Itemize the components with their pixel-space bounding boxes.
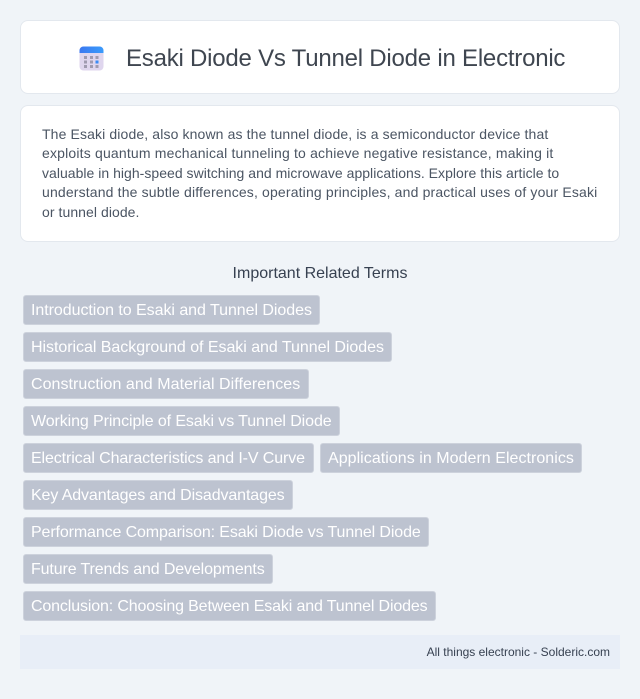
tag bbox=[23, 591, 436, 621]
intro text: understand the subtle differences, operating principles, and practical uses of your Esaki bbox=[42, 184, 597, 200]
section heading: Important Related Terms bbox=[233, 265, 407, 282]
intro text: exploits quantum mechanical tunneling to achieve negative resistance, making it bbox=[42, 145, 554, 161]
tag bbox=[23, 295, 320, 325]
tag bbox=[23, 332, 392, 362]
tag: Future Trends and Developments bbox=[31, 561, 265, 578]
tag: Applications in Modern Electronics bbox=[328, 450, 574, 467]
tag: Historical Background of Esaki and Tunnel Diodes bbox=[31, 339, 384, 356]
tag: Key Advantages and Disadvantages bbox=[31, 487, 285, 504]
intro text: or tunnel diode. bbox=[42, 204, 139, 220]
tag bbox=[23, 517, 429, 547]
intro text: valuable in high-speed switching and microwave applications. Explore this article to bbox=[42, 165, 559, 181]
tag bbox=[320, 443, 582, 473]
tag bbox=[23, 406, 340, 436]
tag: Performance Comparison: Esaki Diode vs Tunnel Diode bbox=[31, 524, 421, 541]
title: Esaki Diode Vs Tunnel Diode in Electronic bbox=[126, 45, 565, 72]
tag bbox=[23, 369, 309, 399]
related terms tag list bbox=[23, 295, 582, 621]
intro text: The Esaki diode, also known as the tunnel diode, is a semiconductor device that bbox=[42, 126, 548, 142]
tag: Conclusion: Choosing Between Esaki and Tunnel Diodes bbox=[31, 598, 428, 615]
footer bbox=[20, 635, 620, 669]
tag: Working Principle of Esaki vs Tunnel Diode bbox=[31, 413, 332, 430]
intro text bbox=[42, 126, 597, 220]
header panel bbox=[20, 20, 620, 94]
footer credit: All things electronic - Solderic.com bbox=[427, 645, 610, 659]
tag bbox=[23, 554, 273, 584]
tag: Electrical Characteristics and I-V Curve bbox=[31, 450, 305, 467]
intro panel bbox=[20, 105, 620, 242]
tag bbox=[23, 443, 314, 473]
tag: Introduction to Esaki and Tunnel Diodes bbox=[31, 302, 312, 319]
tag: Construction and Material Differences bbox=[31, 376, 300, 393]
tag bbox=[23, 480, 293, 510]
icon: calendar bbox=[80, 46, 104, 70]
